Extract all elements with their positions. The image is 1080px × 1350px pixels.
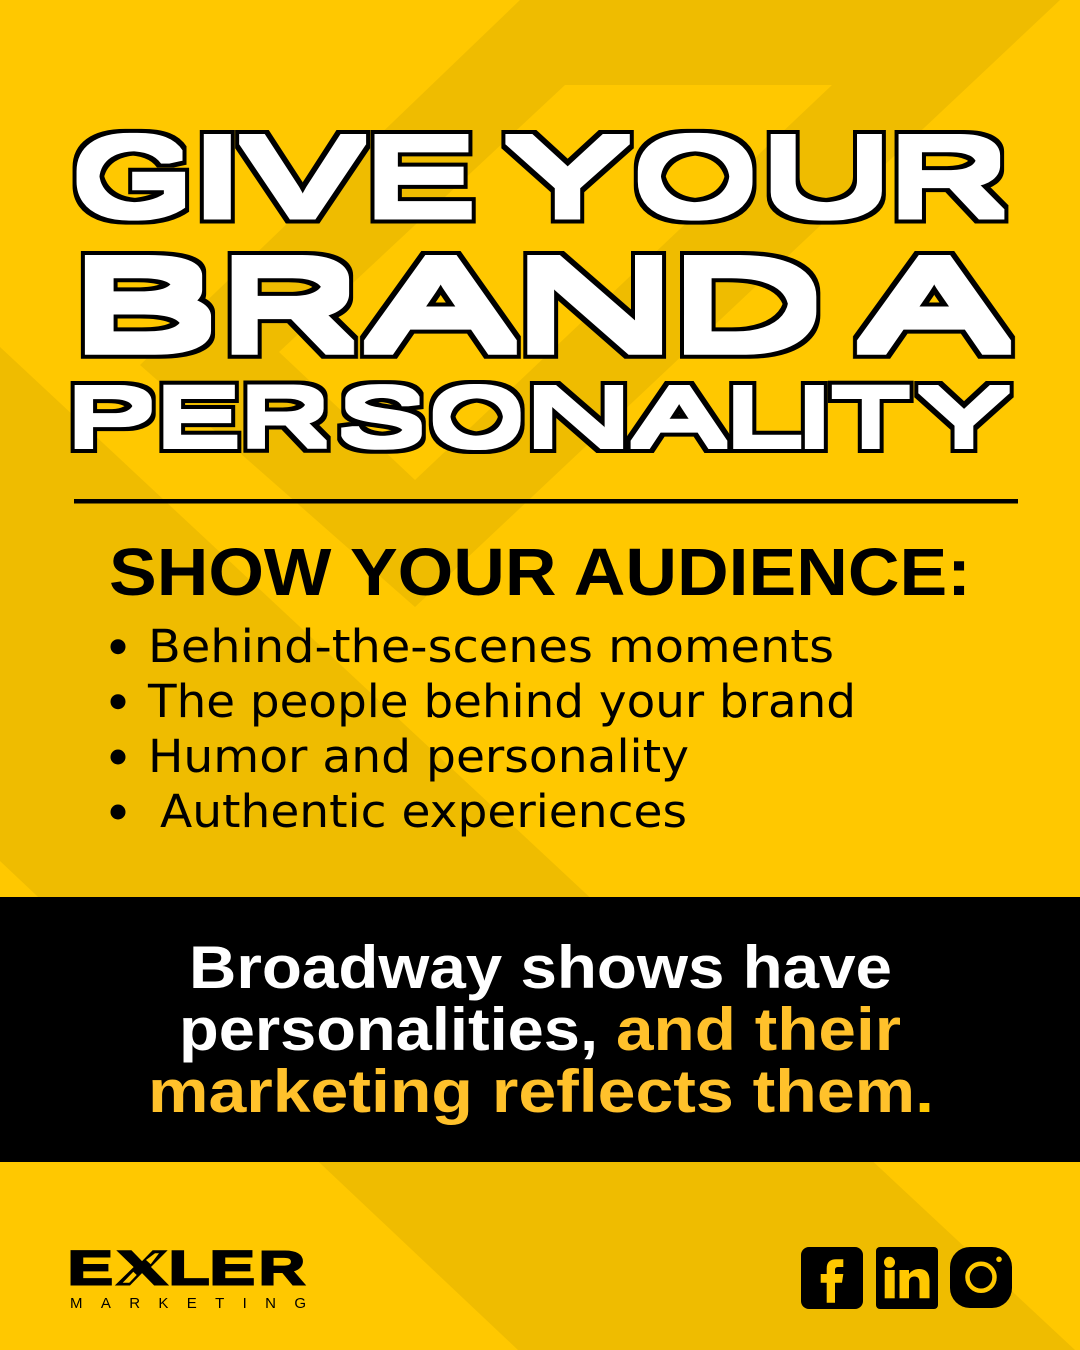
black callout band [0, 897, 1080, 1162]
bullet list [110, 620, 856, 838]
icon: facebook [801, 1247, 863, 1309]
list item 2: The people behind your brand [147, 675, 856, 728]
list item 1: Behind-the-scenes moments [148, 620, 834, 673]
callout line 2: and their [616, 995, 901, 1063]
title line: BRAND A: B [71, 236, 219, 375]
title line: PERSONALITY: R [240, 372, 330, 463]
title line: PERSONALITY: L [725, 372, 803, 463]
callout line 3: marketing reflects them . [148, 1057, 934, 1125]
callout line 1: Broadway shows have [189, 933, 892, 1001]
title line: GIVE YOUR: R [889, 116, 1008, 238]
logo: Exler Marketing: L [168, 1243, 210, 1296]
logo: Exler Marketing: X [117, 1243, 167, 1296]
title line: GIVE YOUR: I [189, 116, 246, 238]
heading: show your audience: SHOW YOUR AUDIENCE: [109, 535, 971, 610]
title line: BRAND A: A [860, 236, 1008, 375]
callout line 2: personalities, [179, 995, 598, 1063]
title line: GIVE YOUR: O [634, 116, 756, 238]
title line: PERSONALITY: E [156, 372, 240, 463]
title line: BRAND A: N [513, 236, 677, 375]
logo: Exler Marketing: E [67, 1243, 113, 1296]
logo: Exler Marketing: E [209, 1243, 255, 1296]
logo: Exler Marketing: R [259, 1243, 305, 1296]
title line: GIVE YOUR: Y [505, 116, 630, 238]
title line: PERSONALITY: I [795, 372, 834, 463]
title line: PERSONALITY: A [633, 372, 726, 463]
title line: BRAND A: R [220, 236, 359, 375]
title line: PERSONALITY: T [832, 372, 910, 463]
list item 3: Humor and personality [148, 730, 689, 783]
social icons [801, 1247, 1012, 1309]
title line: PERSONALITY: N [525, 372, 632, 463]
title line: BRAND A: A [367, 236, 514, 375]
title line: PERSONALITY: P [67, 372, 156, 463]
title line: GIVE YOUR: G [73, 116, 193, 238]
icon: instagram [950, 1247, 1012, 1308]
logo: Exler Marketing [67, 1243, 306, 1312]
logo: Exler Marketing: MARKETING [70, 1295, 306, 1312]
title line: PERSONALITY: S [338, 372, 425, 463]
list item 4: Authentic experiences [160, 785, 687, 838]
title line: PERSONALITY: O [430, 372, 523, 463]
icon: linkedin [876, 1247, 938, 1309]
title line: GIVE YOUR: E [365, 116, 475, 238]
title line: PERSONALITY: Y [918, 372, 1010, 463]
title line: GIVE YOUR: V [242, 116, 363, 238]
title [67, 116, 1010, 463]
title line: BRAND A: D [671, 236, 822, 375]
title line: GIVE YOUR: U [761, 116, 892, 238]
